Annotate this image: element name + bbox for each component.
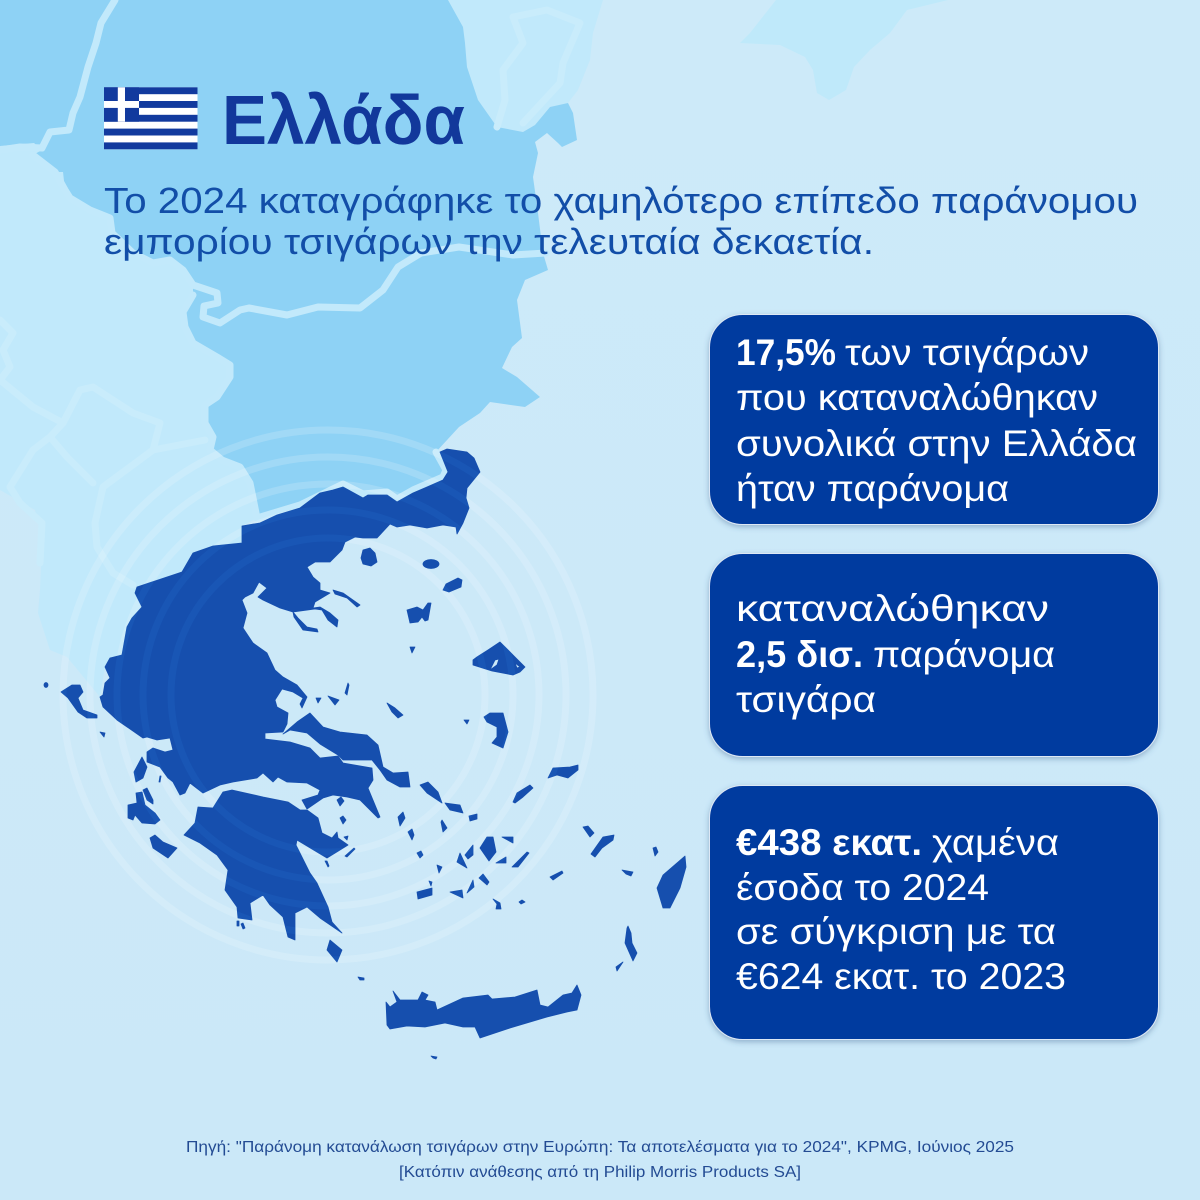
icon: Greek flag: [104, 87, 198, 149]
Ikaria: [513, 785, 533, 803]
Cyclades: [398, 782, 529, 909]
panel: 17,5% illicit share: [710, 314, 1158, 524]
Evia: [283, 713, 410, 787]
panel: 2,5 billion illicit cigarettes: παράνομα: [873, 634, 1055, 675]
Peloponnese: [184, 790, 348, 940]
mainland Greece: [100, 449, 480, 818]
subtitle: Το 2024 καταγράφηκε το χαμηλότερο επίπεδο παράνομου: [104, 180, 1138, 221]
rings over land: [65, 528, 514, 904]
panel: 17,5% illicit share: των τσιγάρων: [845, 332, 1089, 373]
Saronic and southern islands: [325, 797, 364, 980]
panel: lost revenue: έσοδα το 2024: [736, 867, 989, 908]
panel: lost revenue: [710, 786, 1158, 1040]
source note: Πηγή: "Παράνομη κατανάλωση τσιγάρων στην Ευρώπη: Τα αποτελέσματα για το 2024", KPMG, Ιούνιος 2025: [186, 1139, 1014, 1156]
subtitle: [104, 180, 1138, 262]
subtitle: εμπορίου τσιγάρων την τελευταία δεκαετία.: [104, 221, 874, 262]
Rhodes: [657, 856, 686, 908]
panel: 2,5 billion illicit cigarettes: τσιγάρα: [736, 679, 876, 720]
interior borders: [0, 10, 580, 585]
Ionian islands: [44, 682, 245, 929]
map: neighbouring countries: [0, 0, 948, 697]
panel: 17,5% illicit share: συνολικά στην Ελλάδα: [736, 423, 1137, 464]
panel: 2,5 billion illicit cigarettes: [710, 554, 1158, 756]
panel: lost revenue: σε σύγκριση με τα: [736, 911, 1056, 952]
title: Ελλάδα: [222, 81, 465, 159]
panel: lost revenue: €624 εκατ. το 2023: [736, 956, 1066, 997]
map: Greece: [44, 449, 686, 1059]
Dodecanese: [431, 826, 658, 1059]
Crete: [386, 985, 581, 1038]
Athos peninsula: [333, 590, 360, 607]
Chios: [484, 713, 508, 748]
northern Aegean islands: [316, 548, 469, 724]
Samos: [548, 765, 578, 778]
panel: 17,5% illicit share: 17,5%: [736, 332, 836, 373]
source note: [Κατόπιν ανάθεσης από τη Philip Morris Products SA]: [399, 1164, 801, 1181]
Lesvos: [473, 642, 525, 675]
panel: 2,5 billion illicit cigarettes: καταναλώθηκαν: [736, 588, 1049, 629]
Moldova and western Ukraine landmass: [448, 0, 603, 132]
western Balkans landmass: [0, 143, 257, 697]
Romania and Bulgaria: [33, 0, 577, 518]
concentric rings: [63, 430, 593, 960]
top-left country: [0, 0, 115, 150]
Crimea and eastern Ukraine landmass: [740, 0, 948, 100]
Lemnos: [407, 603, 431, 623]
panel: 17,5% illicit share: ήταν παράνομα: [736, 468, 1009, 509]
panel: lost revenue: €438 εκατ.: [736, 822, 922, 863]
source note: [186, 1139, 1014, 1181]
panel: 17,5% illicit share: που καταναλώθηκαν: [736, 377, 1098, 418]
panel: lost revenue: χαμένα: [932, 822, 1059, 863]
panel: 2,5 billion illicit cigarettes: 2,5 δισ.: [736, 634, 863, 675]
border lines: [0, 0, 546, 518]
